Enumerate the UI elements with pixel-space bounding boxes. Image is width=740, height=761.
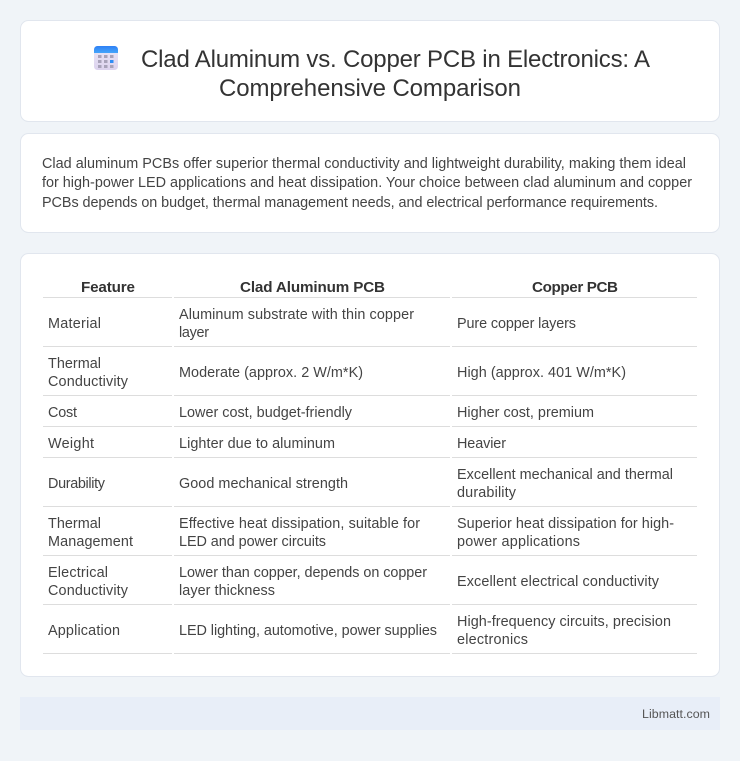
row: durability [48,467,673,501]
row: material: Aluminum substrate with thin copper [179,307,414,323]
row: application: High-frequency circuits, precision [457,614,671,630]
row: thermal management: Effective heat dissipation, suitable for [179,516,420,532]
row: durability: Good mechanical strength [179,476,348,492]
text block: introduction: Clad aluminum PCBs offer superior thermal conductivity and lightweight durability, making them ideal [42,156,686,172]
text block: introduction: PCBs depends on budget, thermal management needs, and electrical performance requirements. [42,195,658,211]
row: thermal management [48,516,674,550]
row: application: Application [48,623,120,639]
text block: introduction [42,156,692,211]
row: electrical conductivity: Lower than copper, depends on copper [179,565,427,581]
row: durability: Excellent mechanical and thermal [457,467,673,483]
row: thermal conductivity: Moderate (approx. 2 W/m*K) [179,365,363,381]
panel: comparison table [20,254,720,676]
icon: calendar [94,46,118,70]
row: electrical conductivity: Conductivity [48,583,129,599]
row: thermal management: Management [48,534,133,550]
row: application: electronics [457,632,528,648]
row: cost [48,405,594,421]
table header: Clad Aluminum PCB [240,279,385,296]
text block: introduction: for high-power LED applications and heat dissipation. Your choice between clad aluminum and copper [42,175,692,191]
row: weight: Weight [48,436,94,452]
row: electrical conductivity: Excellent electrical conductivity [457,574,660,590]
title: Clad Aluminum vs. Copper PCB in Electronics: A [141,46,650,73]
footer [20,697,720,730]
row: cost: Lower cost, budget-friendly [179,405,353,421]
row: weight [48,436,506,452]
row: application: LED lighting, automotive, power supplies [179,623,437,639]
title [141,46,650,102]
panel: title header [20,20,720,122]
row: weight: Heavier [457,436,506,452]
row: cost: Cost [48,405,77,421]
table header [81,279,618,296]
row: material: Pure copper layers [457,316,576,332]
row: material [48,307,576,341]
panel: introduction [20,134,720,232]
row: durability: durability [457,485,517,501]
row: electrical conductivity [48,565,660,599]
row: electrical conductivity: layer thickness [179,583,275,599]
row: thermal conductivity: Thermal [48,356,101,372]
row: thermal management: power applications [457,534,580,550]
row: material: layer [179,325,209,341]
row: thermal management: LED and power circuits [179,534,326,550]
title: Comprehensive Comparison [219,75,521,102]
row: thermal management: Superior heat dissipation for high- [457,516,674,532]
row: durability: Durability [48,476,106,492]
row: application [48,614,671,648]
row: thermal conductivity: Conductivity [48,374,129,390]
row: cost: Higher cost, premium [457,405,594,421]
row: material: Material [48,316,101,332]
footer: Libmatt.com [642,707,710,721]
row: weight: Lighter due to aluminum [179,436,335,452]
row: thermal conductivity: High (approx. 401 W/m*K) [457,365,626,381]
row: thermal management: Thermal [48,516,101,532]
table header: Feature [81,279,135,296]
row: thermal conductivity [48,356,626,390]
row: electrical conductivity: Electrical [48,565,108,581]
table header: Copper PCB [532,279,618,296]
